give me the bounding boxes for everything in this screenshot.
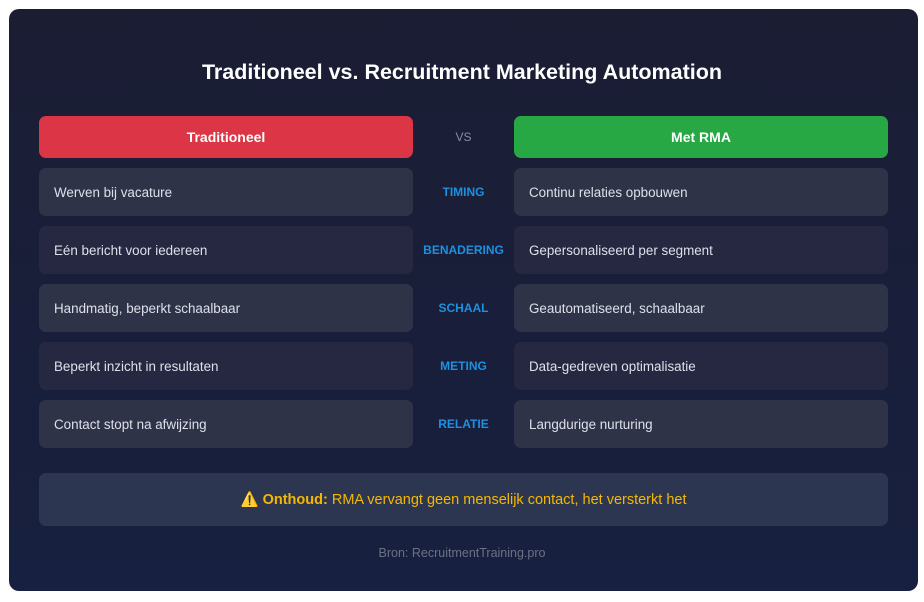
row: schaal	[39, 284, 888, 332]
row: benadering	[39, 226, 888, 274]
header: traditioneel: Traditioneel	[187, 129, 265, 145]
row: benadering: BENADERING	[423, 243, 504, 257]
row: schaal: SCHAAL	[438, 301, 488, 315]
callout: Onthoud:	[263, 492, 328, 508]
row: relatie: RELATIE	[438, 417, 489, 431]
row: schaal: Handmatig, beperkt schaalbaar	[54, 300, 240, 316]
row: timing: Continu relaties opbouwen	[529, 184, 688, 200]
vs label: VS	[455, 130, 472, 144]
row: meting: Beperkt inzicht in resultaten	[54, 358, 218, 374]
row: benadering: Eén bericht voor iedereen	[54, 242, 207, 258]
row: timing	[39, 168, 888, 216]
title: Traditioneel vs. Recruitment Marketing Automation	[202, 60, 722, 84]
row: meting	[39, 342, 888, 390]
row: timing: Werven bij vacature	[54, 184, 172, 200]
header: met RMA: Met RMA	[671, 129, 731, 145]
row: timing: TIMING	[442, 185, 484, 199]
row: relatie	[39, 400, 888, 448]
row: relatie: Langdurige nurturing	[529, 416, 653, 432]
callout	[39, 473, 888, 526]
row: benadering: Gepersonaliseerd per segment	[529, 242, 713, 258]
row: meting: Data-gedreven optimalisatie	[529, 358, 696, 374]
header: traditioneel	[39, 116, 413, 158]
header: met RMA	[514, 116, 888, 158]
callout: ⚠️ RMA vervangt geen menselijk contact, het versterkt het	[240, 492, 686, 508]
row: meting: METING	[440, 359, 487, 373]
row: relatie: Contact stopt na afwijzing	[54, 416, 207, 432]
source: Bron: RecruitmentTraining.pro	[379, 546, 545, 560]
row: schaal: Geautomatiseerd, schaalbaar	[529, 300, 705, 316]
